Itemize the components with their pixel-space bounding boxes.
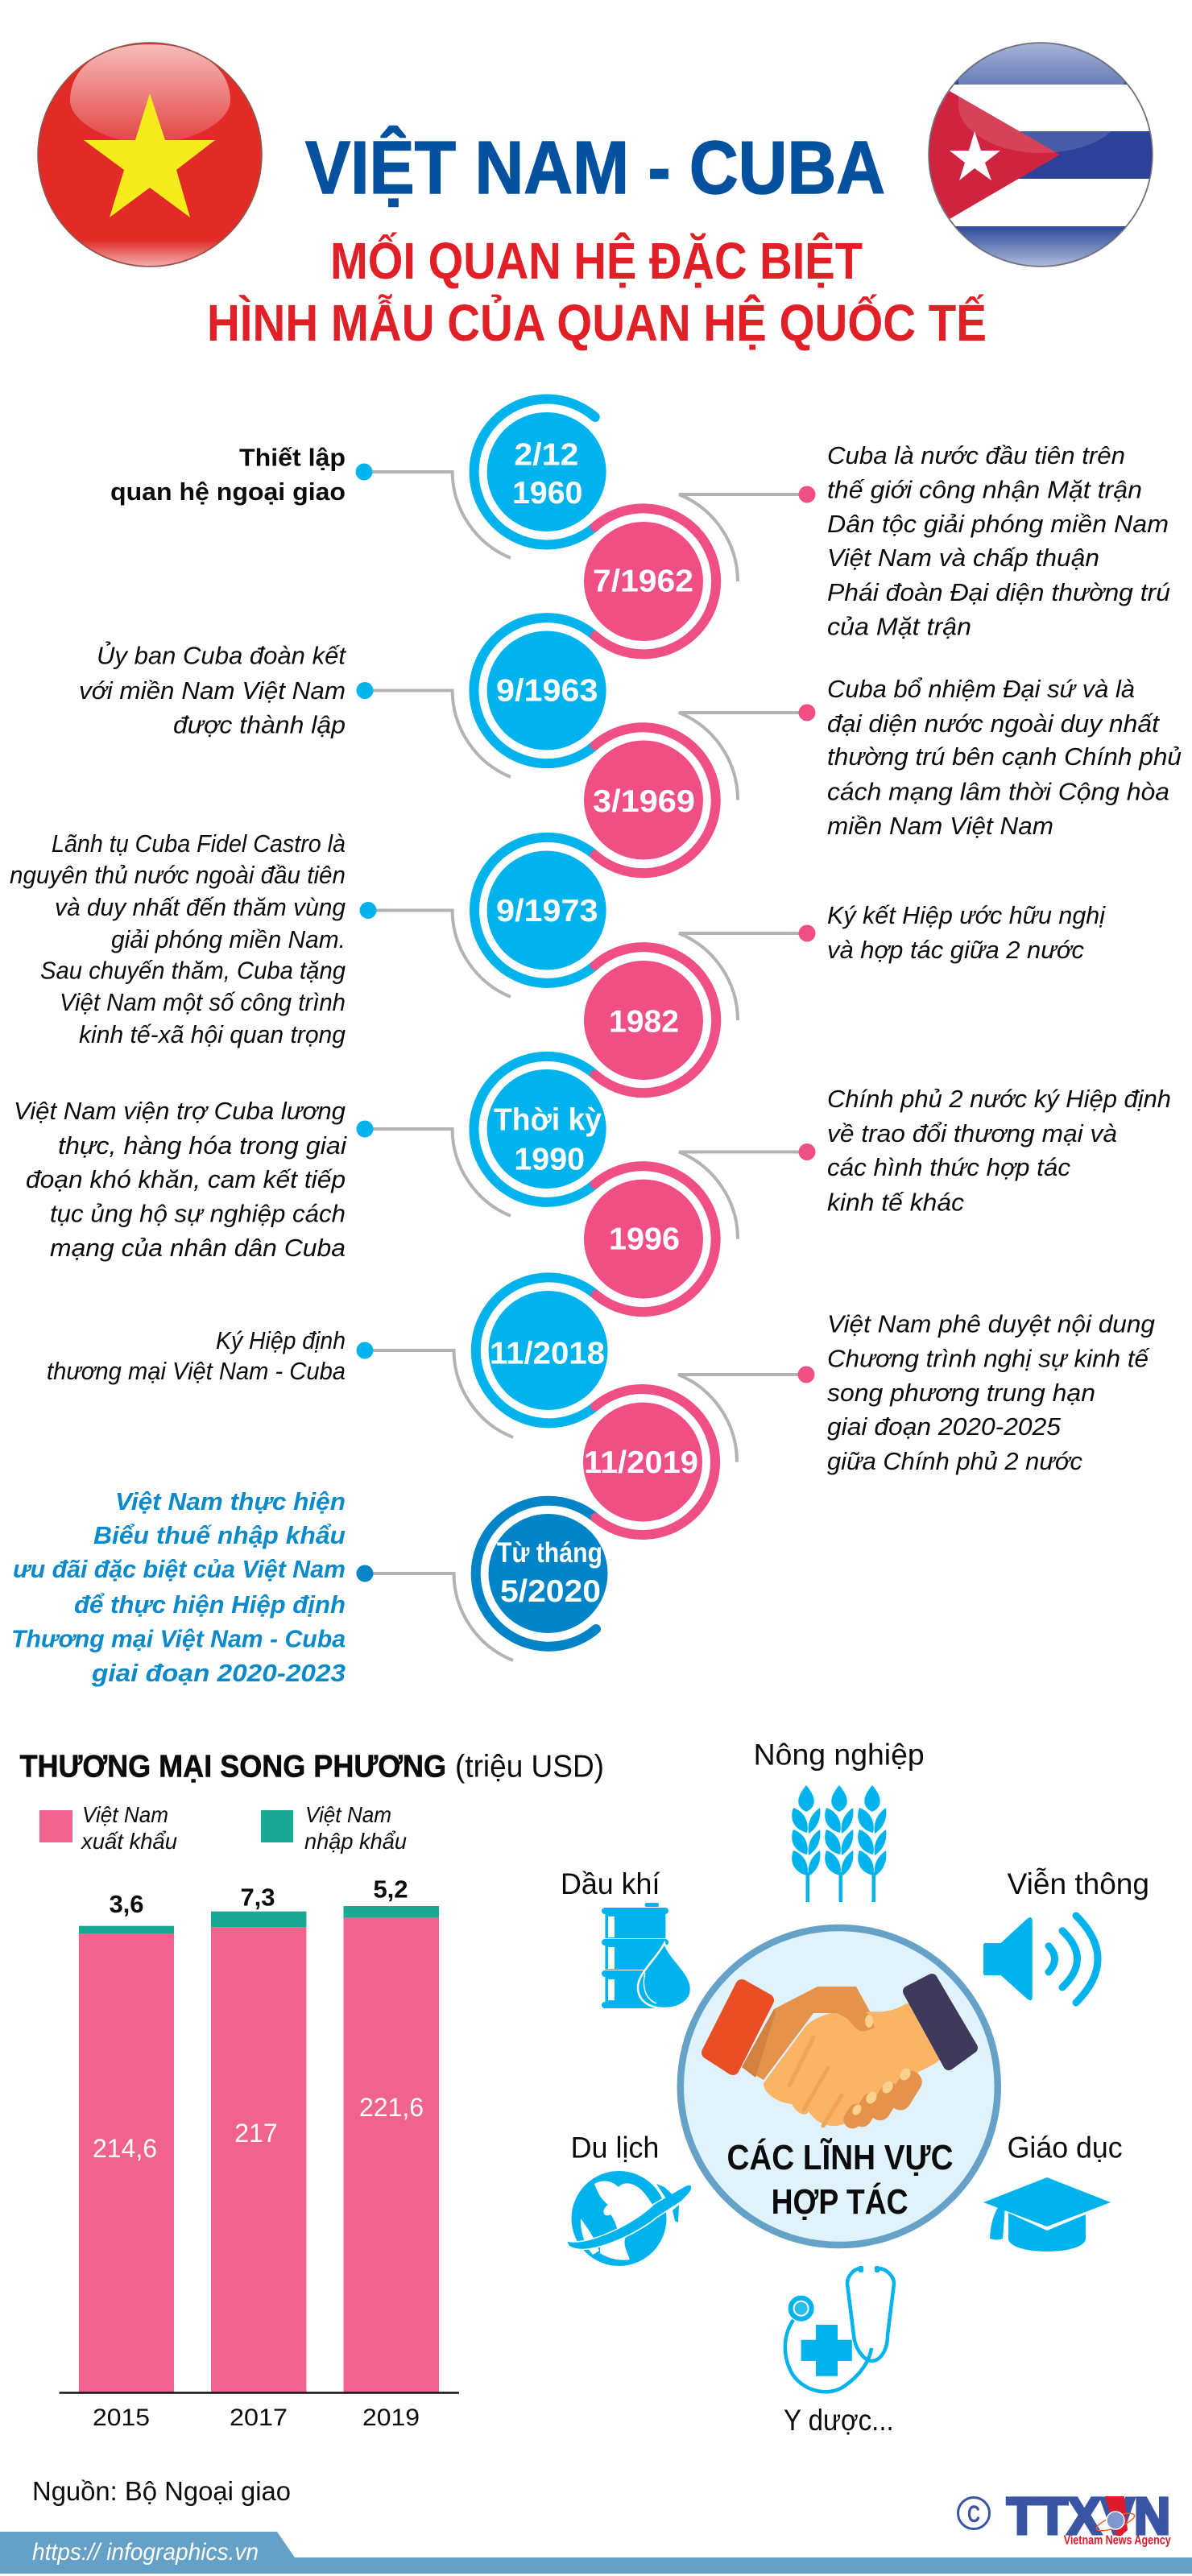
label: Nông nghiệp: Nông nghiệp	[754, 1739, 925, 1772]
logo: TTXVN: C	[967, 2501, 980, 2528]
text: Cuba bổ nhiệm Đại sứ	[827, 675, 1182, 840]
date labels: Thời kỳ	[494, 1103, 602, 1138]
label: Giáo dục: Giáo dục	[1008, 2131, 1123, 2164]
circle caption: HỢP TÁC	[772, 2181, 908, 2222]
text: Ủy ban Cuba: Ủy ban Cuba đoàn kết	[97, 641, 346, 670]
icon: Cuba flag	[918, 40, 1160, 268]
bar 2019: 221,6	[359, 2093, 424, 2122]
chart heading: THƯƠNG MẠI SONG PHƯƠNG	[19, 1750, 446, 1784]
text: Việt Nam viện trợ: tục ủng hộ sự nghiệp cách	[50, 1200, 346, 1228]
date labels: 1960	[512, 476, 582, 511]
bar 2019	[343, 1875, 439, 2431]
text: Cuba là nước đầu tiên: Phái đoàn Đại diện thường trú	[827, 578, 1170, 606]
text: Chính phủ 2 nước	[827, 1085, 1171, 1217]
text: Ký kết Hiệp ước	[827, 901, 1106, 964]
text: Việt Nam phê duyệt: Chương trình nghị sự kinh tế	[827, 1345, 1151, 1372]
label: Viễn thông: Viễn thông	[1008, 1867, 1149, 1900]
date labels: 11/2018	[490, 1337, 605, 1371]
chart legend: Việt Nam	[305, 1802, 391, 1827]
text: Cuba là nước đầu tiên: thế giới công nhận Mặt trận	[827, 475, 1142, 504]
blue rings and circles	[474, 399, 607, 1647]
bar 2019: 2019	[362, 2404, 420, 2431]
text: Việt Nam phê duyệt: song phương trung hạn	[827, 1379, 1095, 1407]
text: Ký kết Hiệp ước: Ký kết Hiệp ước hữu nghị	[827, 901, 1106, 929]
bar 2015	[79, 1890, 174, 2431]
icon: oil barrel and drop	[602, 1903, 691, 2008]
connector dots	[356, 464, 815, 1582]
timeline	[356, 399, 815, 1660]
text: Ký Hiệp định	[47, 1326, 346, 1385]
text: Thiết lập quan hệ ngoại giao: quan hệ ngoại giao	[110, 478, 346, 506]
text: Chính phủ 2 nước: về trao đổi thương mại và	[827, 1119, 1117, 1147]
bar 2017: 7,3	[240, 1883, 275, 1912]
text: highlight 2020: Thương mại Việt Nam - Cuba	[11, 1625, 346, 1652]
subtitle	[207, 231, 987, 352]
icon: speaker	[983, 1916, 1098, 2003]
text: Fidel Castro: kinh tế-xã hội quan trọng	[79, 1020, 346, 1048]
circle caption	[726, 2137, 954, 2222]
text: Cuba là nước đầu tiên: Cuba là nước đầu tiên trên	[827, 441, 1125, 469]
subtitle: MỐI QUAN HỆ ĐẶC BIỆT	[330, 231, 863, 290]
text: Cuba bổ nhiệm Đại sứ: đại diện nước ngoài duy nhất	[827, 709, 1160, 738]
bar 2017: 217	[234, 2119, 278, 2148]
text: Cuba bổ nhiệm Đại sứ: cách mạng lâm thời Cộng hòa	[827, 778, 1169, 806]
date labels: 3/1969	[593, 784, 695, 819]
date labels: Từ tháng	[497, 1537, 602, 1569]
text: Thiết lập quan hệ ngoại giao	[110, 444, 346, 506]
bar 2017	[211, 1883, 306, 2431]
chart legend: nhập khẩu	[304, 1829, 407, 1854]
circle caption: CÁC LĨNH VỰC	[726, 2137, 954, 2177]
label: Dầu khí: Dầu khí	[561, 1867, 660, 1900]
text: Fidel Castro: và duy nhất đến thăm vùng	[55, 893, 346, 921]
connector lines left	[364, 472, 513, 1660]
text: Việt Nam phê duyệt: Việt Nam phê duyệt nội dung	[827, 1310, 1155, 1338]
date labels: 7/1962	[593, 564, 693, 599]
text: Việt Nam viện trợ	[14, 1097, 347, 1262]
date labels: 1996	[609, 1222, 680, 1257]
text: Chính phủ 2 nước: Chính phủ 2 nước ký Hiệp định	[827, 1085, 1171, 1113]
text: Fidel Castro	[10, 829, 346, 1048]
text: Fidel Castro: giải phóng miền Nam.	[111, 925, 346, 953]
text: Việt Nam phê duyệt: giai đoạn 2020-2025	[827, 1412, 1062, 1441]
chart heading: (triệu USD)	[455, 1750, 604, 1784]
date labels: 9/1973	[496, 894, 598, 928]
date labels: 11/2019	[584, 1445, 698, 1480]
text: Chính phủ 2 nước: kinh tế khác	[827, 1189, 965, 1217]
text: Fidel Castro: Lãnh tụ Cuba Fidel Castro là	[52, 829, 346, 858]
chart legend: xuất khẩu	[80, 1829, 177, 1854]
text: Việt Nam viện trợ: thực, hàng hóa trong giai	[58, 1131, 347, 1160]
label: Y dược: Y dược...	[784, 2404, 894, 2437]
text: Cuba là nước đầu tiên: Việt Nam và chấp thuận	[827, 544, 1099, 572]
text: Việt Nam phê duyệt: giữa Chính phủ 2 nước	[827, 1447, 1082, 1475]
text: Ủy ban Cuba	[79, 641, 346, 739]
label: Du lịch: Du lịch	[571, 2131, 659, 2164]
text: Cuba bổ nhiệm Đại sứ: miền Nam Việt Nam	[827, 812, 1053, 840]
chart legend	[39, 1802, 407, 1854]
text: highlight 2020: để thực hiện Hiệp định	[74, 1590, 346, 1619]
cooperation circle	[681, 1928, 998, 2245]
date labels: 1982	[609, 1005, 679, 1040]
text: Việt Nam phê duyệt	[827, 1310, 1155, 1475]
icon: handshake	[708, 1979, 972, 2132]
icon: Vietnam flag	[38, 43, 262, 267]
text: highlight 2020: Biểu thuế nhập khẩu	[93, 1521, 346, 1549]
text: Ủy ban Cuba: được thành lập	[173, 710, 346, 739]
text: Ký kết Hiệp ước: và hợp tác giữa 2 nước	[827, 936, 1084, 964]
icon: globe and plane	[567, 2171, 692, 2266]
date labels: 5/2020	[500, 1574, 601, 1609]
text: Việt Nam viện trợ: mạng của nhân dân Cuba	[50, 1234, 346, 1262]
connector lines right	[678, 494, 807, 1462]
bar 2015: 3,6	[109, 1890, 144, 1918]
bar 2015: 2015	[93, 2404, 150, 2431]
source: Nguồn: Bộ Ngoại giao	[32, 2476, 291, 2506]
text: Ủy ban Cuba: với miền Nam Việt Nam	[79, 676, 346, 705]
text: highlight 2020: ưu đãi đặc biệt của Việt Nam	[13, 1555, 346, 1583]
text: Cuba bổ nhiệm Đại sứ: thường trú bên cạnh Chính phủ	[827, 742, 1182, 771]
text: highlight 2020: Việt Nam thực hiện	[115, 1487, 346, 1515]
icon: wheat	[792, 1785, 886, 1902]
text: highlight 2020	[11, 1487, 346, 1687]
text: Ký Hiệp định: Ký Hiệp định	[216, 1326, 346, 1354]
text: highlight 2020: giai đoạn 2020-2023	[91, 1659, 346, 1687]
bar 2017: 2017	[230, 2404, 288, 2431]
text: Cuba là nước đầu tiên: của Mặt trận	[827, 613, 971, 641]
text: Cuba bổ nhiệm Đại sứ: Cuba bổ nhiệm Đại sứ và là	[827, 675, 1135, 703]
date labels	[490, 437, 698, 1609]
logo: TTXVN: TTXVN	[1007, 2487, 1170, 2545]
text: Việt Nam viện trợ: đoạn khó khăn, cam kết tiếp	[26, 1165, 346, 1193]
text: Fidel Castro: Sau chuyến thăm, Cuba tặng	[40, 957, 346, 984]
footer bar	[0, 2532, 1192, 2574]
text: Fidel Castro: nguyên thủ nước ngoài đầu tiên	[10, 861, 346, 889]
date labels: 1990	[514, 1142, 585, 1176]
icon: stethoscope with cross	[785, 2266, 894, 2392]
date labels: 9/1963	[496, 674, 598, 709]
icon: graduation cap	[983, 2177, 1111, 2251]
bar chart	[60, 1875, 459, 2431]
text: Ký Hiệp định: thương mại Việt Nam - Cuba	[47, 1357, 346, 1385]
text: Cuba là nước đầu tiên: Dân tộc giải phóng miền Nam	[827, 510, 1169, 538]
text: Cuba là nước đầu tiên	[827, 441, 1170, 641]
bar 2019: 5,2	[373, 1875, 408, 1904]
text: Thiết lập quan hệ ngoại giao: Thiết lập	[239, 444, 346, 472]
subtitle: HÌNH MẪU CỦA QUAN HỆ QUỐC TẾ	[207, 293, 987, 352]
title: VIỆT NAM - CUBA	[305, 126, 885, 209]
text: Fidel Castro: Việt Nam một số công trình	[60, 988, 346, 1016]
footer bar: https:// infographics.vn	[32, 2539, 259, 2566]
date labels: 2/12	[514, 437, 578, 472]
text: Chính phủ 2 nước: các hình thức hợp tác	[827, 1153, 1070, 1181]
chart legend: Việt Nam	[82, 1802, 168, 1827]
text: Việt Nam viện trợ: Việt Nam viện trợ Cuba lương	[14, 1097, 346, 1125]
pink rings and circles	[583, 508, 716, 1535]
bar 2015: 214,6	[93, 2134, 157, 2163]
